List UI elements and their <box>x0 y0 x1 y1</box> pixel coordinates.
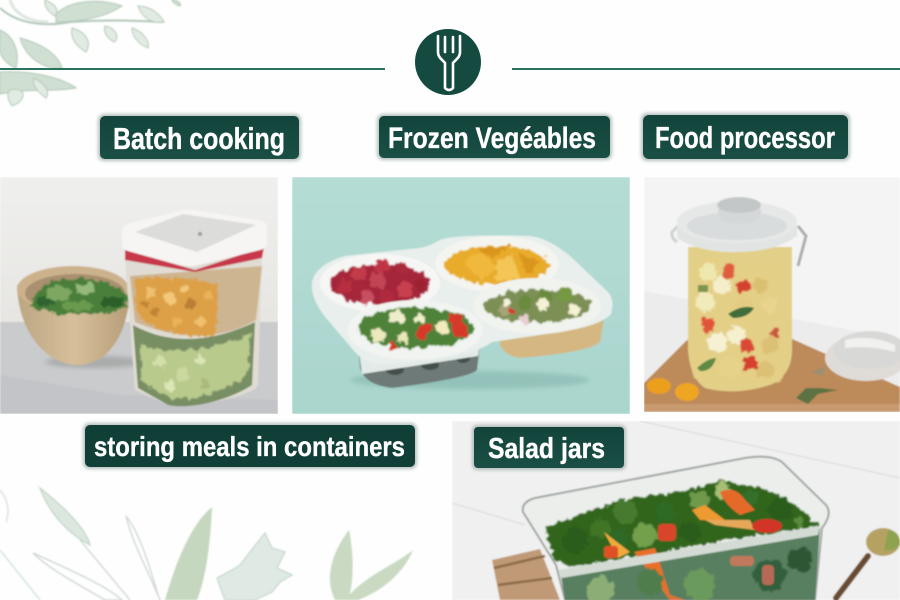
jar clip <box>798 226 806 266</box>
jar of vegetables <box>688 247 792 391</box>
label: food processor <box>641 113 850 161</box>
spoon <box>836 528 900 598</box>
label: food processor: Food processor <box>655 120 835 155</box>
decoration: bottom-left botanical leaves <box>0 488 413 600</box>
storage container <box>122 210 267 406</box>
small glass lid <box>825 331 900 381</box>
bowl of greens <box>17 266 130 365</box>
tray lid <box>312 236 612 364</box>
compartment: broccoli with mozzarella <box>482 276 593 334</box>
label: salad jars: Salad jars <box>488 433 605 465</box>
wooden board <box>492 549 560 600</box>
decoration: top-left herb sprig <box>0 0 181 106</box>
panel: frozen vegetables photo <box>292 177 630 414</box>
orange slices <box>647 378 699 401</box>
glass container <box>523 457 829 600</box>
compartment: mango <box>435 236 559 292</box>
label: batch cooking <box>98 114 301 161</box>
compartment: strawberries <box>320 254 440 312</box>
icon: fork badge <box>415 29 481 95</box>
header rule: right <box>512 68 900 70</box>
label: frozen vegetables: Frozen Vegéables <box>388 122 596 155</box>
label: storing meals in containers <box>83 423 417 469</box>
compartment: green salad with mozzarella <box>358 298 476 352</box>
panel: food processor photo <box>644 177 900 412</box>
label: batch cooking: Batch cooking <box>113 121 285 156</box>
herb sprig <box>796 388 838 404</box>
lower right container body <box>500 318 604 358</box>
header rule: left <box>0 68 385 70</box>
lower left container body <box>358 345 480 388</box>
label: frozen vegetables <box>377 114 612 160</box>
panel: salad jars photo <box>452 421 900 600</box>
label: salad jars <box>472 425 626 470</box>
jar lid <box>672 197 797 252</box>
label: storing meals in containers: storing meals in containers <box>94 431 405 462</box>
panel: batch cooking photo <box>0 177 278 414</box>
